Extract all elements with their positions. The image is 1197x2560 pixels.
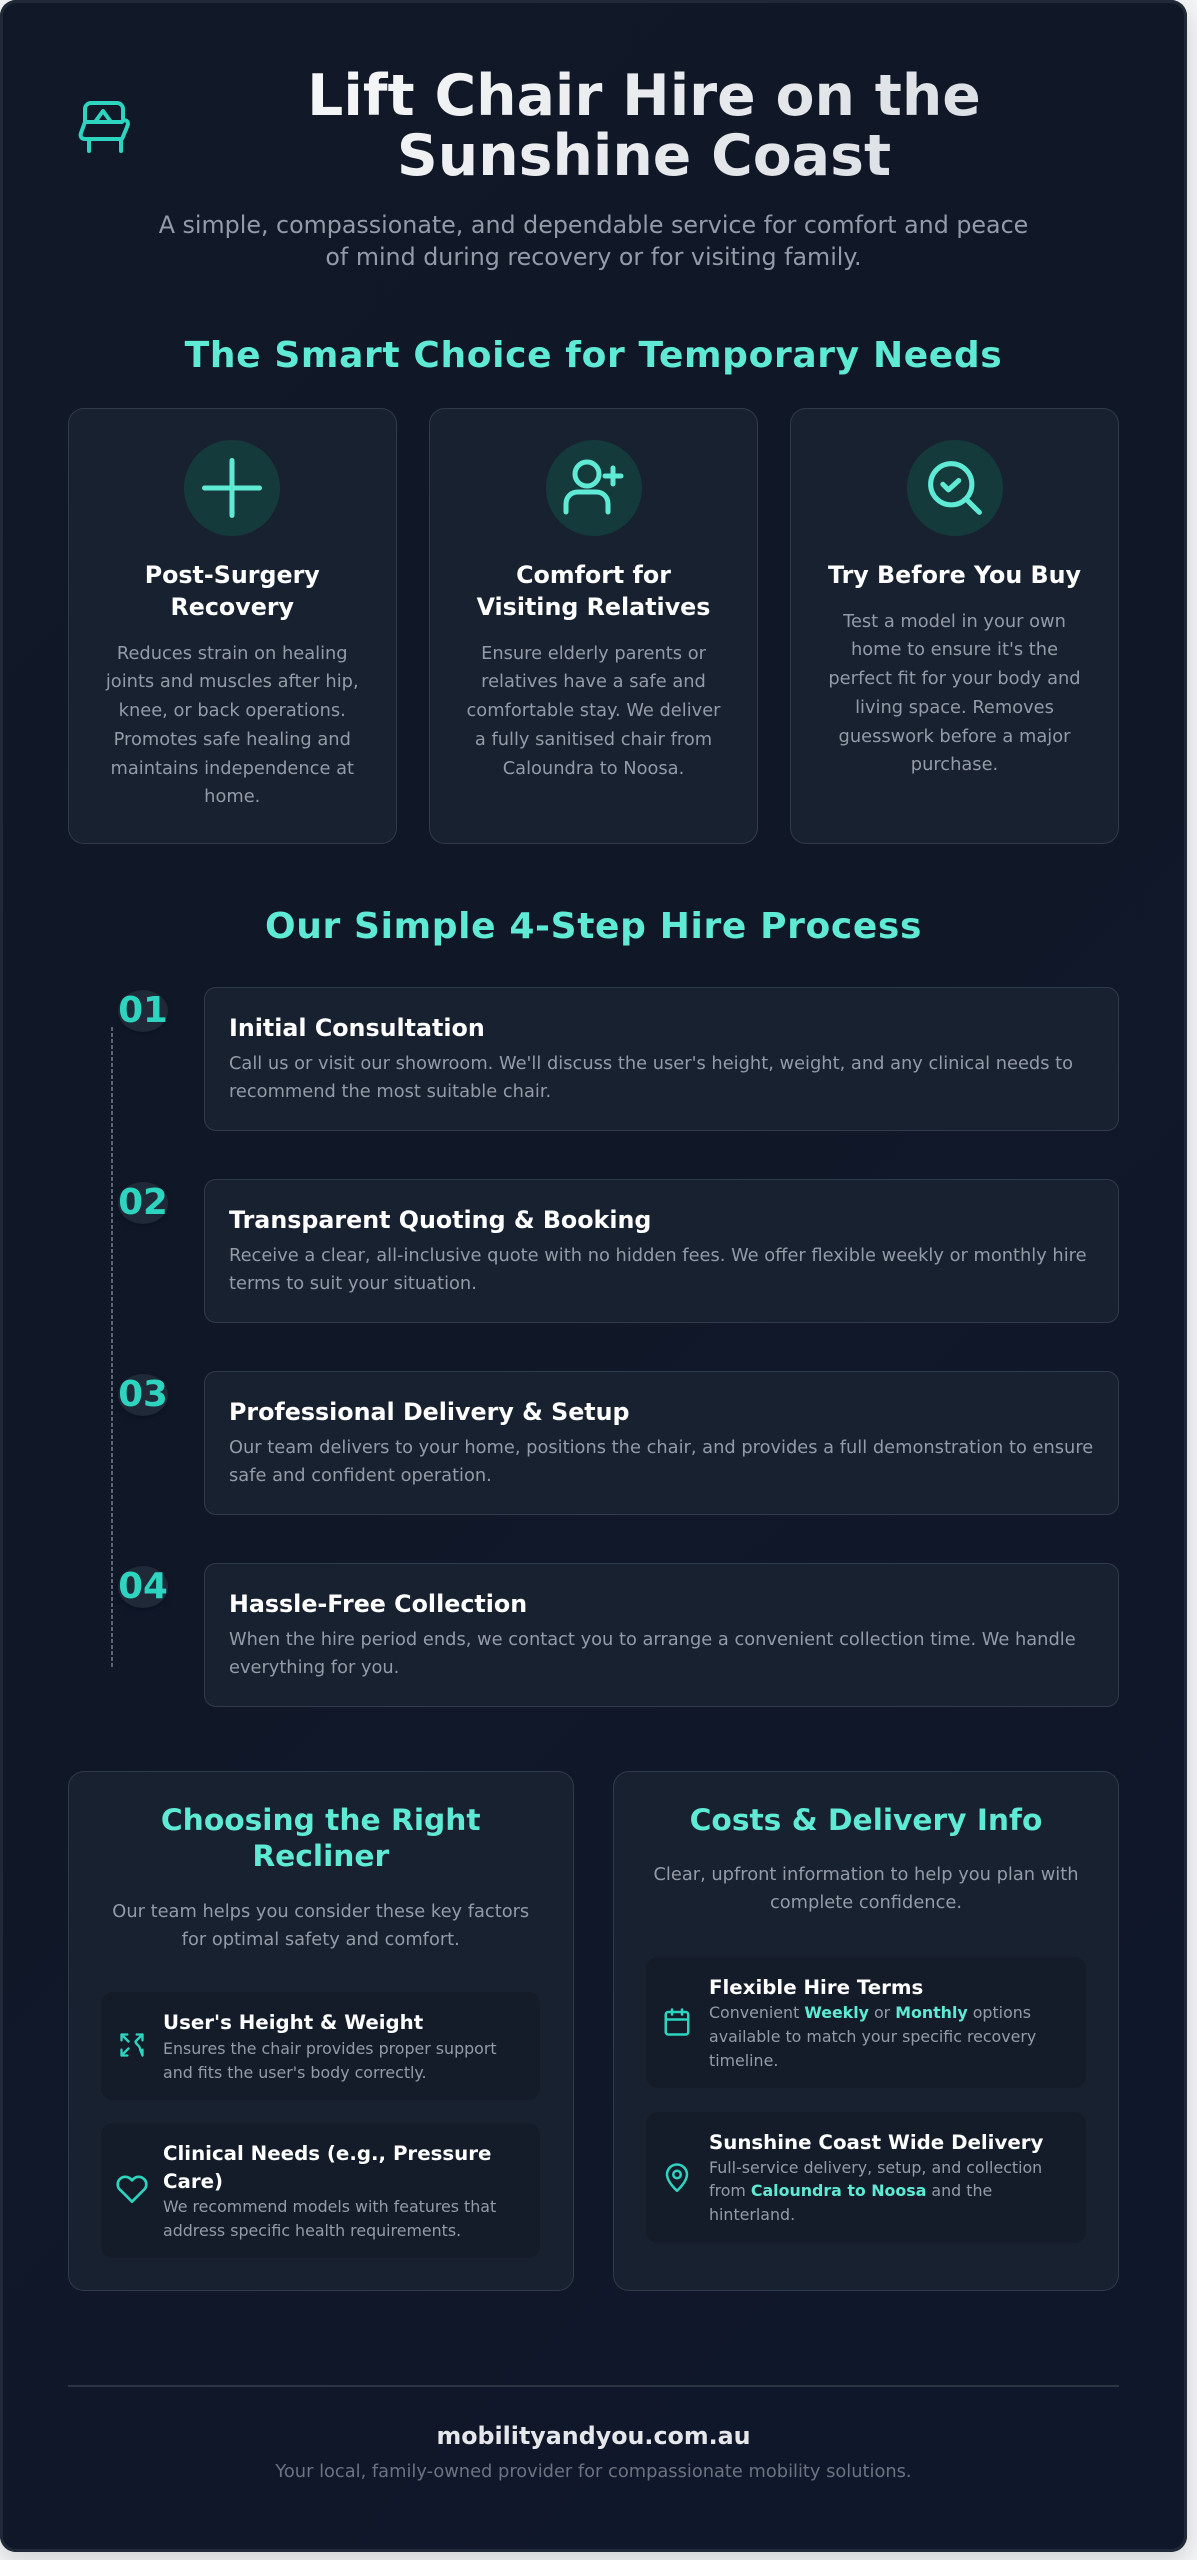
- step text: [229, 1245, 1087, 1294]
- card text: relatives have a safe and: [481, 671, 706, 692]
- card text: Caloundra to Noosa.: [503, 758, 684, 779]
- timeline line: [111, 1027, 113, 1667]
- item text: hinterland.: [709, 2205, 795, 2224]
- title: [68, 66, 1197, 186]
- item text: address specific health requirements.: [163, 2221, 461, 2240]
- item title: Care): [163, 2170, 223, 2193]
- item text: [163, 2197, 496, 2240]
- item text: Full-service delivery, setup, and collection: [709, 2158, 1042, 2176]
- step text: everything for you.: [229, 1657, 399, 1678]
- card text: a fully sanitised chair from: [475, 729, 712, 750]
- panel heading: Recliner: [252, 1838, 389, 1874]
- item text: available to match your specific recovery: [709, 2027, 1036, 2046]
- panel intro: Our team helps you consider these key factors: [112, 1901, 529, 1922]
- step text: [229, 1053, 1073, 1102]
- icon: heart: [116, 2176, 148, 2204]
- item text: We recommend models with features that: [163, 2197, 496, 2216]
- card text: knee, or back operations.: [119, 700, 346, 721]
- card title: Recovery: [170, 593, 294, 621]
- title: Lift Chair Hire on the: [307, 63, 981, 129]
- step 2 card: [204, 1179, 1119, 1323]
- item text: from Caloundra to Noosa and the: [709, 2181, 992, 2200]
- card text: Reduces strain on healing: [117, 642, 348, 664]
- card text: Ensure elderly parents or: [481, 642, 706, 664]
- step title: Professional Delivery & Setup: [229, 1398, 630, 1426]
- card title: Post-Surgery: [145, 561, 320, 589]
- card title: Try Before You Buy: [828, 561, 1081, 589]
- step 1 card: [204, 987, 1119, 1131]
- panel: post-surgery recovery: [68, 408, 397, 844]
- panel: visiting relatives: [429, 408, 758, 844]
- panel heading: Costs & Delivery Info: [690, 1802, 1042, 1838]
- step title: Transparent Quoting & Booking: [229, 1206, 651, 1234]
- panel intro: complete confidence.: [770, 1892, 962, 1913]
- card title: [476, 561, 710, 621]
- item text: Convenient Weekly or Monthly options: [709, 2003, 1031, 2022]
- heading: hire process: Our Simple 4-Step Hire Process: [265, 906, 922, 947]
- card text: home.: [204, 786, 260, 807]
- item title: Clinical Needs (e.g., Pressure: [163, 2142, 491, 2165]
- step text: recommend the most suitable chair.: [229, 1081, 551, 1102]
- step number 02: 02: [118, 1182, 168, 1223]
- step text: Our team delivers to your home, positions the chair, and provides a full demonstration to ensure: [229, 1437, 1093, 1458]
- card text: maintains independence at: [110, 758, 354, 779]
- icon: plus: [184, 440, 280, 536]
- panel intro: [653, 1864, 1079, 1913]
- panel intro: Clear, upfront information to help you plan with: [653, 1864, 1079, 1885]
- panel heading: [161, 1802, 481, 1874]
- card text: guesswork before a major: [839, 726, 1070, 747]
- step text: [229, 1437, 1093, 1486]
- item title: [163, 2142, 491, 2193]
- card text: [828, 610, 1081, 775]
- icon: calendar: [664, 2008, 690, 2036]
- card text: [466, 642, 720, 779]
- icon: expand arrows: [120, 2033, 144, 2057]
- step text: [229, 1629, 1076, 1678]
- panel intro: [112, 1901, 529, 1950]
- item title: User's Height & Weight: [163, 2010, 423, 2034]
- panel: costs and delivery: [613, 1771, 1119, 2291]
- subtitle: A simple, compassionate, and dependable service for comfort and peace: [159, 211, 1028, 239]
- tagline: Your local, family-owned provider for compassionate mobility solutions.: [275, 2461, 912, 2482]
- step 3 card: [204, 1371, 1119, 1515]
- item title: Flexible Hire Terms: [709, 1976, 923, 1998]
- panel: choosing the right recliner: [68, 1771, 574, 2291]
- item title: Sunshine Coast Wide Delivery: [709, 2130, 1043, 2154]
- step text: safe and confident operation.: [229, 1465, 492, 1486]
- title: Sunshine Coast: [397, 123, 891, 189]
- card text: living space. Removes: [855, 697, 1054, 718]
- icon: search check: [907, 440, 1003, 536]
- card title: Comfort for: [516, 561, 671, 589]
- card title: Visiting Relatives: [477, 593, 710, 621]
- subtitle: of mind during recovery or for visiting family.: [325, 243, 862, 271]
- card title: [145, 561, 320, 621]
- step 4 card: [204, 1563, 1119, 1707]
- step number 01: 01: [118, 990, 168, 1031]
- website: mobilityandyou.com.au: [436, 2422, 751, 2450]
- card text: home to ensure it's the: [851, 639, 1058, 660]
- step number 03: 03: [118, 1374, 168, 1415]
- step text: When the hire period ends, we contact you to arrange a convenient collection time. We handle: [229, 1629, 1076, 1650]
- icon: map pin: [666, 2163, 688, 2192]
- step text: Receive a clear, all-inclusive quote with no hidden fees. We offer flexible weekly or monthly hire: [229, 1245, 1087, 1266]
- step title: Initial Consultation: [229, 1014, 485, 1042]
- step title: Hassle-Free Collection: [229, 1590, 527, 1618]
- step text: terms to suit your situation.: [229, 1273, 477, 1294]
- step number 04: 04: [118, 1566, 168, 1607]
- header: [78, 63, 1028, 271]
- item text: timeline.: [709, 2051, 778, 2070]
- card text: Test a model in your own: [843, 610, 1066, 632]
- icon: lift chair: [78, 101, 130, 153]
- item text: [709, 2158, 1042, 2224]
- card text: joints and muscles after hip,: [106, 671, 359, 692]
- item text: [163, 2039, 497, 2082]
- card text: perfect fit for your body and: [828, 668, 1081, 689]
- panel: try before you buy: [790, 408, 1119, 844]
- item: height and weight: [100, 1992, 540, 2100]
- icon: user plus: [546, 440, 642, 536]
- card text: Promotes safe healing and: [114, 729, 351, 750]
- item: clinical needs: [100, 2123, 540, 2258]
- card text: [106, 642, 359, 807]
- item text: [709, 2003, 1036, 2070]
- subtitle: [159, 211, 1028, 271]
- card text: comfortable stay. We deliver: [466, 700, 720, 721]
- panel intro: for optimal safety and comfort.: [182, 1929, 460, 1950]
- item text: and fits the user's body correctly.: [163, 2063, 427, 2082]
- heading: smart choice: The Smart Choice for Temporary Needs: [185, 334, 1002, 376]
- footer: [68, 2385, 1119, 2497]
- step text: Call us or visit our showroom. We'll discuss the user's height, weight, and any clinical needs to: [229, 1053, 1073, 1074]
- item text: Ensures the chair provides proper support: [163, 2039, 497, 2058]
- item: flexible hire terms: [646, 1957, 1086, 2088]
- card text: purchase.: [911, 754, 998, 775]
- item: delivery: [646, 2112, 1086, 2243]
- panel heading: Choosing the Right: [161, 1802, 481, 1838]
